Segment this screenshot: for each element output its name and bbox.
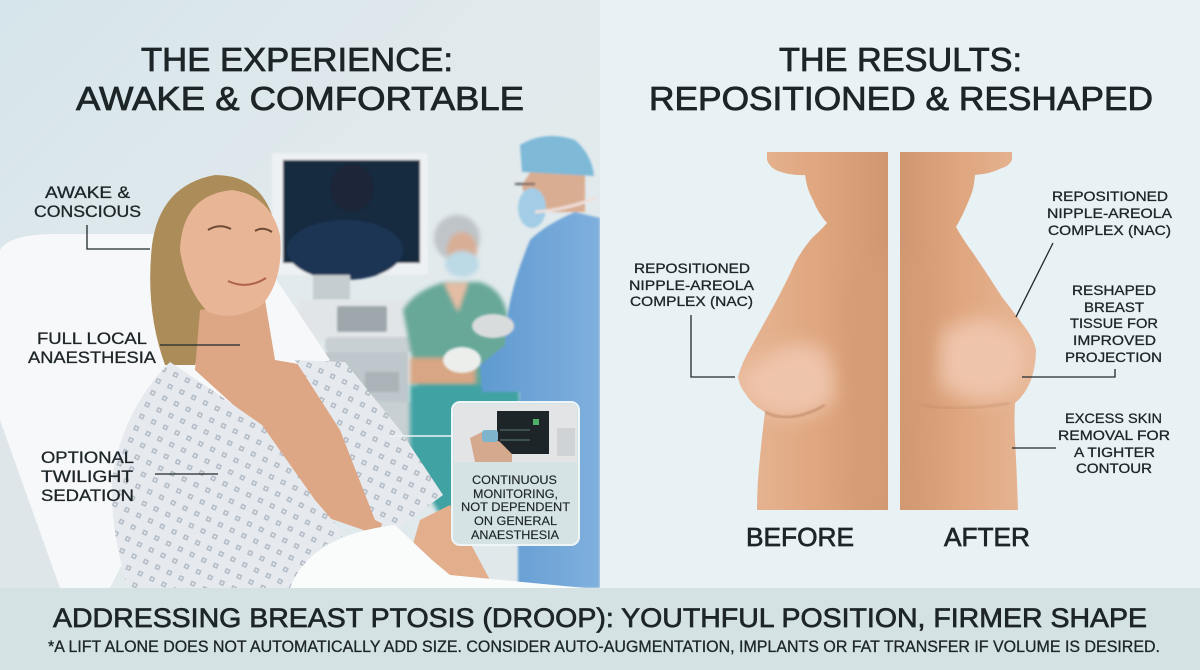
label: after nac: NIPPLE-AREOLA — [1047, 205, 1173, 221]
inset caption: ANAESTHESIA — [471, 528, 559, 542]
label: reshaped breast tissue: PROJECTION — [1065, 349, 1162, 365]
surgical drape — [410, 385, 520, 515]
caption: after: AFTER — [944, 522, 1030, 552]
patient — [112, 175, 585, 588]
caption: before: BEFORE — [746, 522, 854, 552]
label: full local anaesthesia: FULL LOCAL — [37, 330, 147, 348]
bed frame shading — [0, 420, 60, 588]
patterned gown — [112, 362, 345, 588]
label: excess skin removal: CONTOUR — [1076, 460, 1152, 476]
label: before nac: REPOSITIONED — [634, 260, 750, 276]
panel: the experience — [0, 0, 600, 588]
label: after nac: REPOSITIONED — [1052, 188, 1168, 204]
neck and chest — [195, 300, 395, 535]
hair — [150, 175, 272, 365]
label: excess skin removal: REMOVAL FOR — [1058, 427, 1170, 443]
label: awake and conscious: CONSCIOUS — [34, 203, 141, 221]
label: reshaped breast tissue: TISSUE FOR — [1070, 315, 1158, 331]
panel: the results — [630, 47, 1172, 547]
label: excess skin removal: EXCESS SKIN — [1065, 410, 1162, 426]
face — [180, 190, 281, 316]
label: reshaped breast tissue: IMPROVED — [1073, 332, 1156, 348]
surgeon gloves — [443, 314, 514, 373]
icon: wall monitor — [272, 153, 428, 300]
footer disclaimer: *A LIFT ALONE DOES NOT AUTOMATICALLY ADD SIZE. CONSIDER AUTO-AUGMENTATION, IMPLANTS OR FAT TRANSFER IF VOLUME IS DESIRED. — [48, 638, 1160, 656]
inset caption: CONTINUOUS — [472, 473, 557, 487]
hospital bed and pillow — [0, 234, 330, 588]
label: reshaped breast tissue: BREAST — [1084, 299, 1144, 315]
inset caption: ON GENERAL — [474, 514, 557, 528]
inset monitor photo — [454, 404, 577, 462]
label: optional twilight sedation: OPTIONAL — [41, 449, 134, 467]
surgeon — [443, 136, 600, 588]
label: reshaped breast tissue — [1022, 282, 1162, 377]
label: before nac: NIPPLE-AREOLA — [629, 277, 755, 293]
label: excess skin removal — [1012, 410, 1170, 476]
label: awake and conscious — [34, 184, 150, 249]
label: awake and conscious: AWAKE & — [45, 184, 130, 202]
heading: the experience: THE EXPERIENCE: — [141, 42, 453, 79]
nurse — [403, 215, 510, 400]
heading: the results — [649, 42, 1153, 118]
heading: the experience — [76, 47, 523, 111]
icon: ultrasound console — [324, 304, 412, 446]
label: after nac — [1016, 188, 1173, 317]
inset: continuous monitoring — [452, 402, 579, 545]
footer band — [0, 588, 1200, 670]
heading: the experience: AWAKE & COMFORTABLE — [76, 81, 524, 118]
label: optional twilight sedation: TWILIGHT — [41, 468, 133, 486]
label: optional twilight sedation: SEDATION — [41, 487, 134, 505]
label: reshaped breast tissue: RESHAPED — [1072, 282, 1156, 298]
label: full local anaesthesia: ANAESTHESIA — [28, 349, 156, 367]
before torso silhouette — [730, 150, 890, 512]
label: before nac — [629, 260, 755, 377]
arrow: inset leader — [390, 435, 452, 437]
label: before nac: COMPLEX (NAC) — [630, 293, 753, 309]
inset caption — [461, 473, 571, 542]
label: after nac: COMPLEX (NAC) — [1048, 222, 1171, 238]
heading: the results: REPOSITIONED & RESHAPED — [649, 81, 1153, 118]
forearm and hand — [414, 505, 490, 579]
label: optional twilight sedation — [41, 449, 218, 505]
inset caption: MONITORING, — [473, 487, 558, 501]
label: full local anaesthesia — [28, 332, 240, 364]
label: excess skin removal: A TIGHTER — [1074, 444, 1155, 460]
heading: the results: THE RESULTS: — [779, 42, 1022, 79]
footer headline: ADDRESSING BREAST PTOSIS (DROOP): YOUTHFUL POSITION, FIRMER SHAPE — [53, 603, 1147, 633]
facial features — [208, 226, 272, 285]
inset caption: NOT DEPENDENT — [461, 500, 571, 514]
after torso silhouette — [898, 150, 1040, 512]
